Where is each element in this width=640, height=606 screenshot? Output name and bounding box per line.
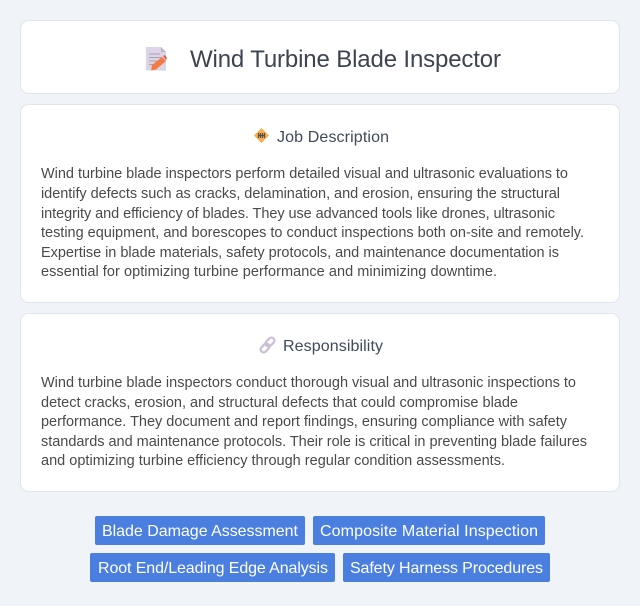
text block: job description: testing equipment, and borescopes to conduct inspections both on-site and remotely. — [41, 225, 584, 241]
text block: responsibility: and optimizing turbine efficiency through regular condition assessments. — [41, 453, 505, 469]
panel: title card — [20, 20, 620, 94]
text block: job description: Expertise in blade materials, safety protocols, and maintenance documentation is — [41, 245, 559, 261]
text block: responsibility: performance. They document and report findings, ensuring compliance with safety — [41, 414, 568, 430]
text block: job description — [41, 166, 584, 280]
tag: root end / leading edge analysis: Root End/Leading Edge Analysis — [98, 560, 328, 577]
text block: responsibility — [41, 375, 587, 469]
tag: safety harness procedures — [343, 553, 550, 582]
text block: responsibility: detect cracks, erosion, and structural defects that could compromise blade — [41, 395, 518, 411]
icon: diamond sign — [254, 128, 269, 143]
heading: responsibility: Responsibility — [283, 338, 383, 355]
heading: job description: Job Description — [277, 129, 389, 146]
tag: safety harness procedures: Safety Harness Procedures — [350, 560, 543, 577]
tag: composite material inspection — [313, 516, 545, 545]
tags — [90, 516, 550, 582]
panel: responsibility — [20, 314, 620, 492]
text block: responsibility: standards and maintenance protocols. Their role is critical in preventing blade failures — [41, 434, 587, 450]
tag: blade damage assessment — [95, 516, 305, 545]
panel: job description — [20, 104, 620, 302]
text block: job description: integrity and efficiency of blades. They use advanced tools like drones, ultrasonic — [41, 206, 555, 222]
icon: memo with pencil — [146, 47, 167, 70]
tag: composite material inspection: Composite Material Inspection — [320, 523, 538, 540]
title: Wind Turbine Blade Inspector — [190, 46, 501, 73]
text block: job description: Wind turbine blade inspectors perform detailed visual and ultrasonic evaluations to — [41, 166, 568, 182]
tag: blade damage assessment: Blade Damage Assessment — [102, 523, 299, 540]
text block: job description: identify defects such as cracks, delamination, and erosion, ensuring the structural — [41, 186, 560, 202]
tag: root end / leading edge analysis — [90, 553, 335, 582]
icon: link — [259, 336, 276, 354]
text block: job description: essential for optimizing turbine performance and minimizing downtime. — [41, 264, 497, 280]
text block: responsibility: Wind turbine blade inspectors conduct thorough visual and ultrasonic inspections to — [41, 375, 576, 391]
